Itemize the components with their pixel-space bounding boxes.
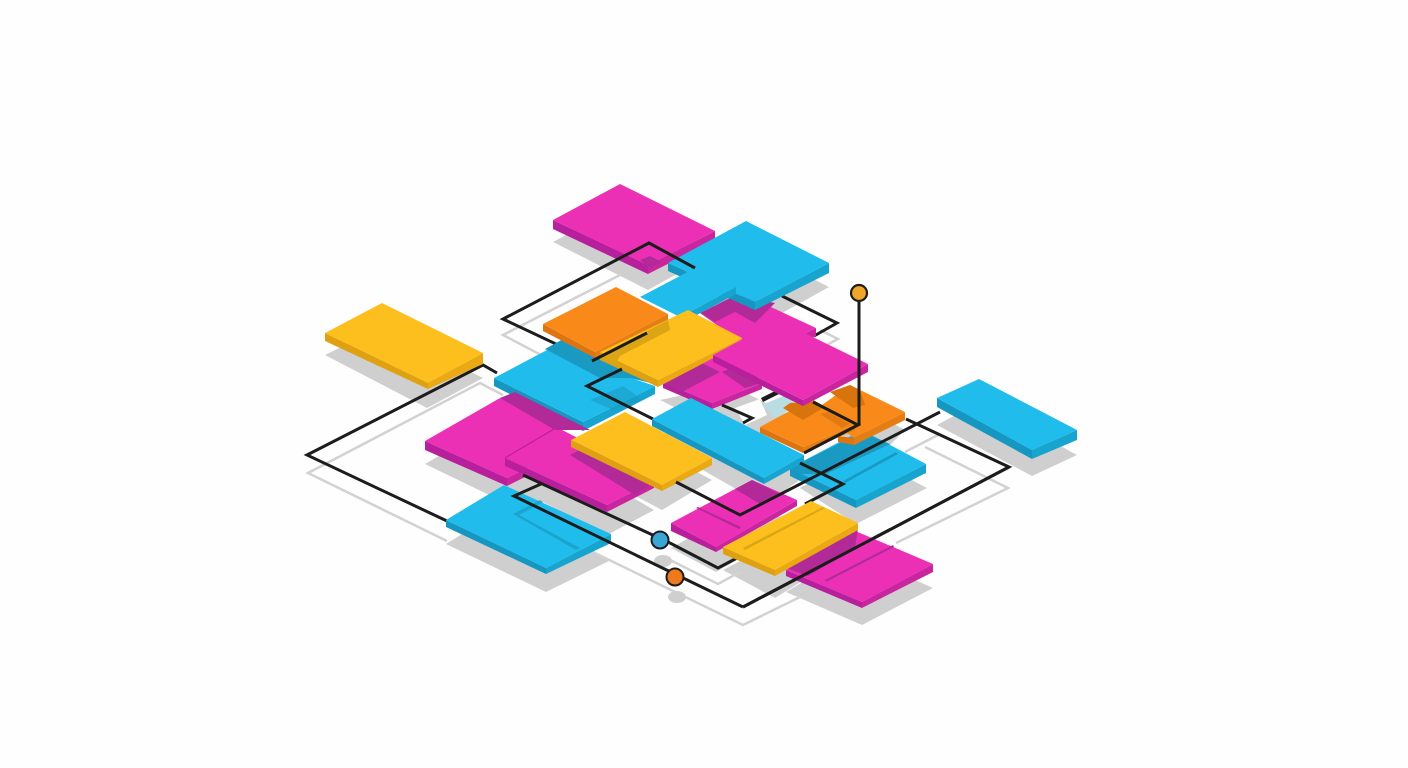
block: cyan lower left	[446, 485, 611, 574]
block: magenta far bottom	[786, 528, 933, 608]
block: magenta second left	[505, 429, 654, 512]
block: magenta lower	[671, 480, 797, 552]
node: blue	[652, 532, 668, 548]
block: cyan left centre	[494, 338, 655, 431]
block: cyan lower right	[790, 430, 926, 508]
block: magenta large left	[425, 392, 640, 486]
connector from orange block corner	[592, 333, 647, 361]
block: orange top	[543, 287, 668, 358]
block: orange front right	[760, 399, 855, 453]
connector from blue node to yellow block	[670, 543, 737, 568]
block: magenta large centre	[713, 320, 868, 406]
connector over lower right blocks	[743, 467, 1009, 607]
block: orange back right	[815, 385, 905, 445]
grey line shadows	[308, 275, 1008, 625]
block: magenta top	[553, 184, 715, 274]
lower connector over cyan block	[514, 484, 743, 607]
connector from cyan corner toward yellow block	[800, 463, 843, 504]
node shadows	[654, 555, 686, 603]
black connector frame behind blocks	[307, 296, 1009, 607]
block: yellow centre top	[600, 310, 742, 387]
block: magenta lower centre under large	[663, 345, 762, 409]
block: yellow lower centre	[571, 412, 712, 491]
block: yellow far left	[325, 303, 483, 389]
second connector frame	[587, 369, 653, 419]
block: cyan long centre	[652, 398, 804, 484]
top connector frame segment	[503, 243, 695, 361]
node: orange	[666, 568, 684, 586]
connector with orange pin	[804, 285, 867, 453]
block: cyan far right	[937, 379, 1077, 459]
block: cyan large top	[668, 221, 829, 310]
centre connector fragments	[722, 392, 778, 423]
magenta connector to blue node	[523, 475, 670, 543]
block: yellow lower right	[723, 501, 858, 576]
ground shadows of the blocks	[325, 206, 1077, 625]
connector crossing centre	[676, 412, 940, 515]
block: magenta back centre	[700, 295, 816, 364]
block: cyan small	[640, 267, 736, 324]
